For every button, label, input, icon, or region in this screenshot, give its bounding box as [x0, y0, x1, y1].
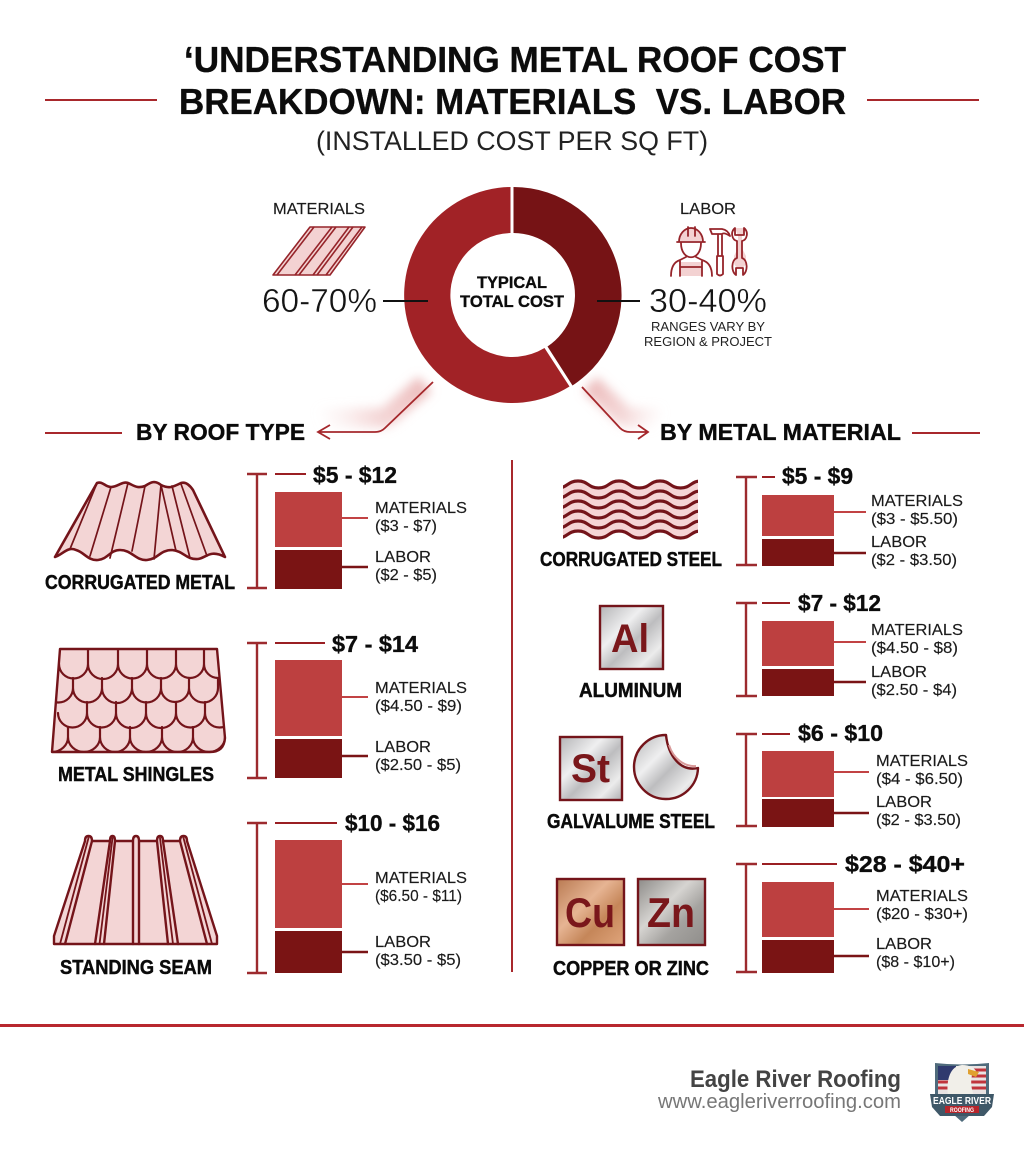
- stacked cost bar: [247, 810, 467, 973]
- icon: St tile: [560, 737, 622, 800]
- stacked cost bar: LABOR: [871, 664, 927, 681]
- stacked cost bar: MATERIALS: [375, 500, 467, 517]
- stacked cost bar: LABOR: [375, 739, 431, 756]
- panel: corrugated steel: [540, 463, 963, 571]
- stacked cost bar: ($2 - $5): [375, 567, 437, 584]
- labor share: LABOR: [680, 201, 736, 218]
- icon: company logo: [930, 1063, 994, 1122]
- stacked cost bar: ($20 - $30+): [876, 906, 968, 923]
- stacked cost bar: LABOR: [871, 534, 927, 551]
- panel: metal shingles: [36, 631, 467, 786]
- label: STANDING SEAM: [60, 957, 212, 979]
- icon: Cu tile: Cu: [565, 889, 615, 936]
- stacked cost bar: ($4.50 - $8): [871, 640, 958, 657]
- title: BREAKDOWN: MATERIALS VS. LABOR: [179, 81, 846, 122]
- stacked cost bar: MATERIALS: [375, 680, 467, 697]
- footer brand: [657, 1066, 901, 1113]
- stacked cost bar: MATERIALS: [871, 493, 963, 510]
- icon: St tile: St: [571, 747, 610, 791]
- stacked cost bar: ($3 - $7): [375, 518, 437, 535]
- subtitle: (INSTALLED COST PER SQ FT): [316, 126, 708, 156]
- stacked cost bar: MATERIALS: [876, 888, 968, 905]
- stacked cost bar: $28 - $40+: [845, 851, 965, 877]
- icon: worker and tools: [671, 227, 747, 276]
- icon: corrugated steel waves: [558, 481, 701, 538]
- stacked cost bar: [736, 463, 963, 569]
- icon: Al tile: Al: [611, 617, 649, 661]
- donut chart: typical total cost: TYPICAL: [477, 274, 547, 292]
- stacked cost bar: LABOR: [375, 549, 431, 566]
- panel: aluminum: [579, 590, 963, 702]
- title: ‘UNDERSTANDING METAL ROOF COST: [184, 39, 846, 80]
- arrow: to roof type: [318, 382, 433, 439]
- stacked cost bar: $10 - $16: [345, 810, 440, 836]
- label: CORRUGATED STEEL: [540, 549, 722, 571]
- stacked cost bar: ($2.50 - $5): [375, 757, 461, 774]
- stacked cost bar: LABOR: [375, 934, 431, 951]
- stacked cost bar: LABOR: [876, 794, 932, 811]
- icon: company logo: EAGLE RIVER: [933, 1095, 991, 1107]
- heading: by roof type: BY ROOF TYPE: [136, 419, 305, 445]
- stacked cost bar: $5 - $12: [313, 462, 397, 488]
- materials share: MATERIALS: [273, 201, 365, 218]
- materials share: 60-70%: [262, 282, 377, 319]
- label: GALVALUME STEEL: [547, 811, 715, 833]
- stacked cost bar: [736, 851, 968, 973]
- heading: by metal material: BY METAL MATERIAL: [660, 419, 901, 445]
- stacked cost bar: MATERIALS: [375, 870, 467, 887]
- stacked cost bar: LABOR: [876, 936, 932, 953]
- stacked cost bar: ($2 - $3.50): [871, 552, 957, 569]
- stacked cost bar: ($2 - $3.50): [876, 812, 961, 829]
- label: COPPER OR ZINC: [553, 958, 709, 980]
- note: [644, 320, 772, 349]
- stacked cost bar: MATERIALS: [871, 622, 963, 639]
- labor share: 30-40%: [649, 282, 767, 319]
- stacked cost bar: $5 - $9: [782, 463, 853, 489]
- label: CORRUGATED METAL: [45, 572, 235, 594]
- icon: company logo: ROOFING: [950, 1107, 974, 1114]
- footer brand: Eagle River Roofing: [690, 1066, 901, 1093]
- stacked cost bar: ($2.50 - $4): [871, 682, 957, 699]
- stacked cost bar: [736, 590, 963, 699]
- panel: corrugated metal: [45, 462, 467, 594]
- stacked cost bar: $7 - $14: [332, 631, 418, 657]
- panel: standing seam: [54, 810, 467, 979]
- label: ALUMINUM: [579, 680, 682, 702]
- stacked cost bar: ($4.50 - $9): [375, 698, 462, 715]
- icon: Al tile: [600, 606, 663, 669]
- stacked cost bar: ($6.50 - $11): [375, 888, 462, 905]
- stacked cost bar: ($8 - $10+): [876, 954, 955, 971]
- icon: Zn tile: Zn: [647, 889, 695, 936]
- labor share: [597, 201, 772, 349]
- icon: corrugated metal: [55, 482, 225, 560]
- icon: Cu tile: [557, 879, 624, 945]
- label: METAL SHINGLES: [58, 764, 214, 786]
- note: RANGES VARY BY: [651, 320, 766, 334]
- materials share: [262, 201, 428, 319]
- panel: copper or zinc: [553, 851, 968, 980]
- stacked cost bar: [247, 462, 467, 589]
- icon: metal shingles: [36, 649, 234, 752]
- donut chart: typical total cost: TOTAL COST: [460, 293, 564, 311]
- stacked cost bar: ($3 - $5.50): [871, 511, 958, 528]
- footer brand: www.eagleriverroofing.com: [657, 1091, 901, 1113]
- icon: standing seam: [54, 836, 217, 944]
- stacked cost bar: [736, 720, 968, 829]
- stacked cost bar: [247, 631, 467, 778]
- stacked cost bar: $7 - $12: [798, 590, 881, 616]
- stacked cost bar: $6 - $10: [798, 720, 883, 746]
- icon: coil disc: [634, 735, 698, 799]
- stacked cost bar: MATERIALS: [876, 753, 968, 770]
- note: REGION & PROJECT: [644, 335, 772, 349]
- stacked cost bar: ($4 - $6.50): [876, 771, 963, 788]
- donut chart: typical total cost: [404, 187, 622, 403]
- panel: galvalume steel: [547, 720, 968, 833]
- arrow: to metal material: [582, 384, 662, 439]
- icon: roof panel: [273, 227, 365, 275]
- stacked cost bar: ($3.50 - $5): [375, 952, 461, 969]
- title: [179, 39, 846, 122]
- icon: Zn tile: [638, 879, 705, 945]
